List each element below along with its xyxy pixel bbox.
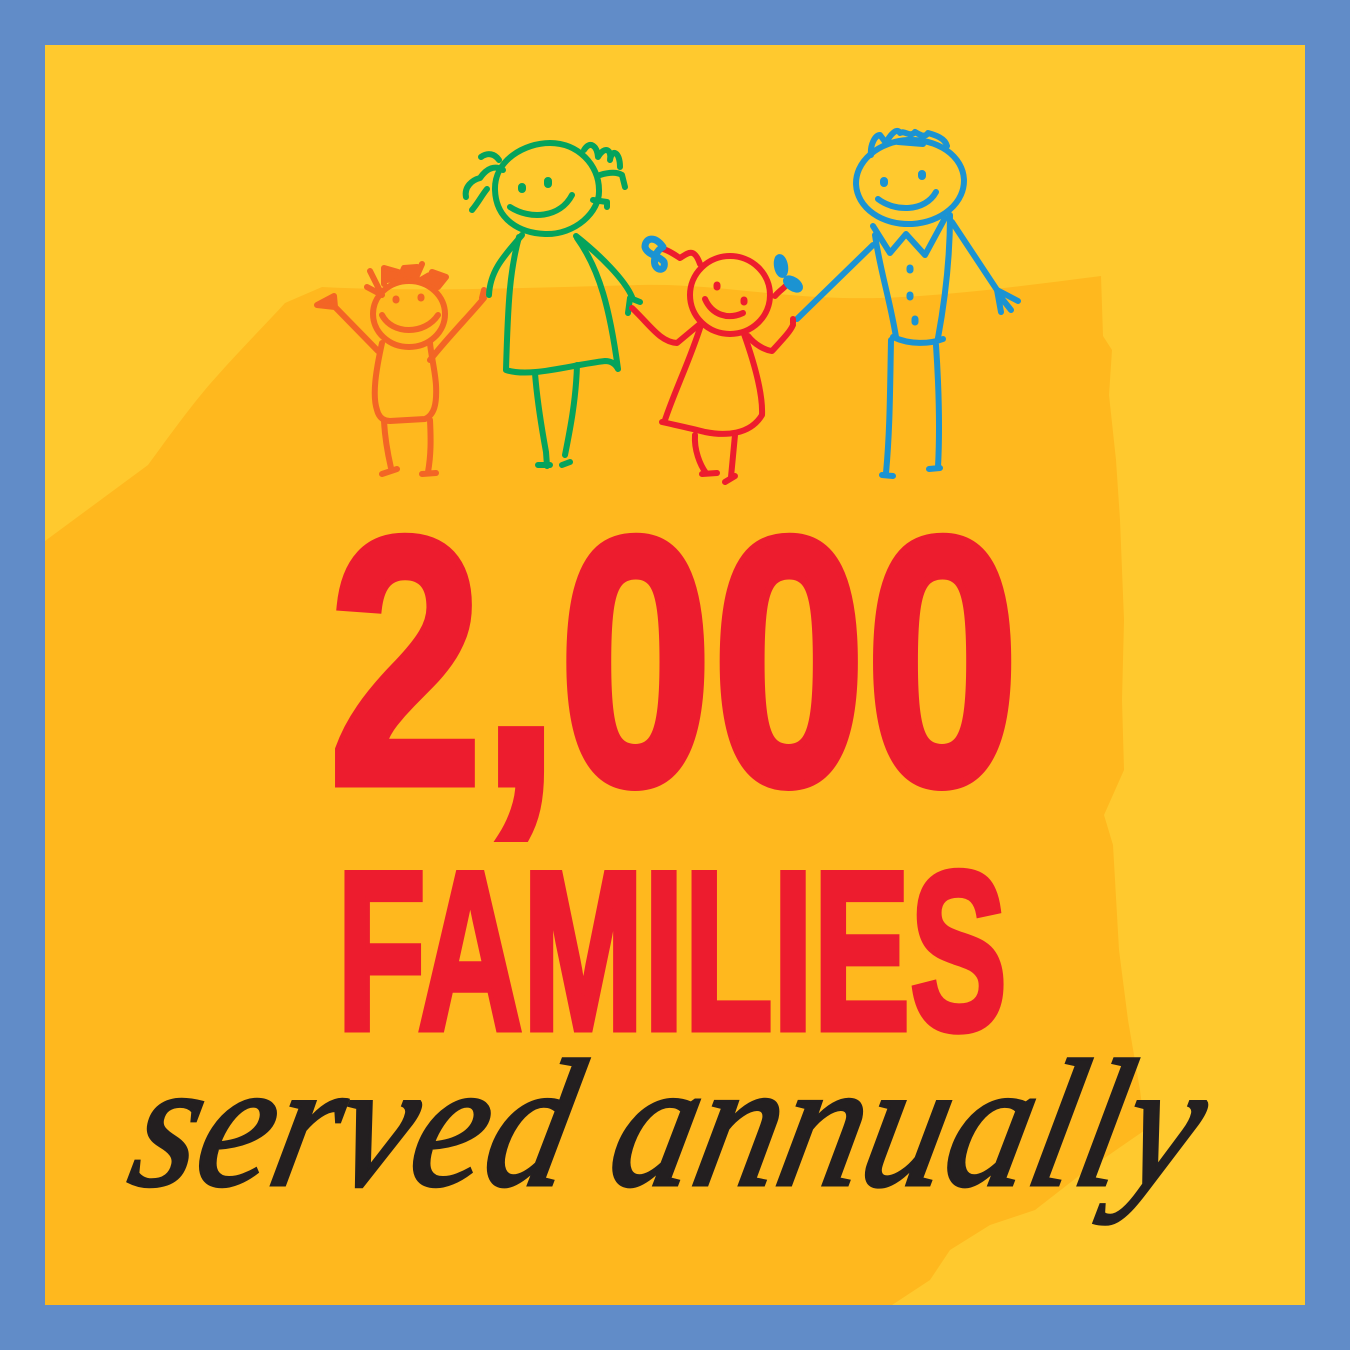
figure: green mother [466, 143, 640, 466]
mother dress [506, 237, 618, 373]
mother head [495, 143, 599, 234]
father eyes [884, 174, 922, 183]
mother mouth [510, 195, 572, 215]
boy eyes [396, 297, 421, 300]
mother hair right [584, 145, 625, 207]
mother eyes [522, 181, 548, 189]
boy hands [317, 290, 484, 307]
boy hair [367, 264, 446, 295]
girl legs and feet [695, 435, 735, 482]
big number: 2,000 [329, 464, 1019, 858]
father arms [797, 222, 997, 319]
girl arms [632, 308, 793, 351]
mother hair left [466, 154, 503, 210]
girl dress [662, 325, 762, 434]
boy arms [336, 298, 484, 360]
father hand [997, 290, 1018, 312]
girl pigtails [663, 249, 789, 296]
state map silhouette [45, 276, 1145, 1305]
boy head [373, 281, 445, 347]
mother hands [628, 298, 640, 313]
father head [854, 137, 966, 227]
father shirt [875, 215, 950, 338]
family illustration [317, 131, 1018, 482]
red thumb joint [790, 319, 796, 323]
boy mouth [382, 315, 438, 330]
blue hair bows [645, 239, 802, 292]
father hair [871, 131, 947, 155]
boy body [375, 343, 436, 421]
bow right lower [784, 276, 802, 292]
girl mouth [705, 299, 743, 316]
father waist [893, 337, 943, 343]
father collar [873, 218, 945, 255]
father buttons [910, 268, 915, 322]
figure: blue father [797, 131, 1018, 476]
girl eyes [717, 285, 744, 302]
figure: red girl [632, 249, 793, 482]
father legs and feet [882, 340, 940, 476]
heading: families: FAMILIES [337, 824, 1007, 1077]
father mouth [878, 192, 936, 208]
mother arms [489, 235, 632, 297]
tagline: served annually: served annually [117, 1023, 1225, 1225]
bow left [645, 239, 664, 269]
boy hair fill [384, 268, 444, 288]
boy legs and feet [382, 420, 436, 474]
girl head [690, 256, 770, 334]
bow right upper [775, 256, 787, 276]
mother legs and feet [535, 365, 577, 466]
figure: orange boy [317, 264, 484, 474]
